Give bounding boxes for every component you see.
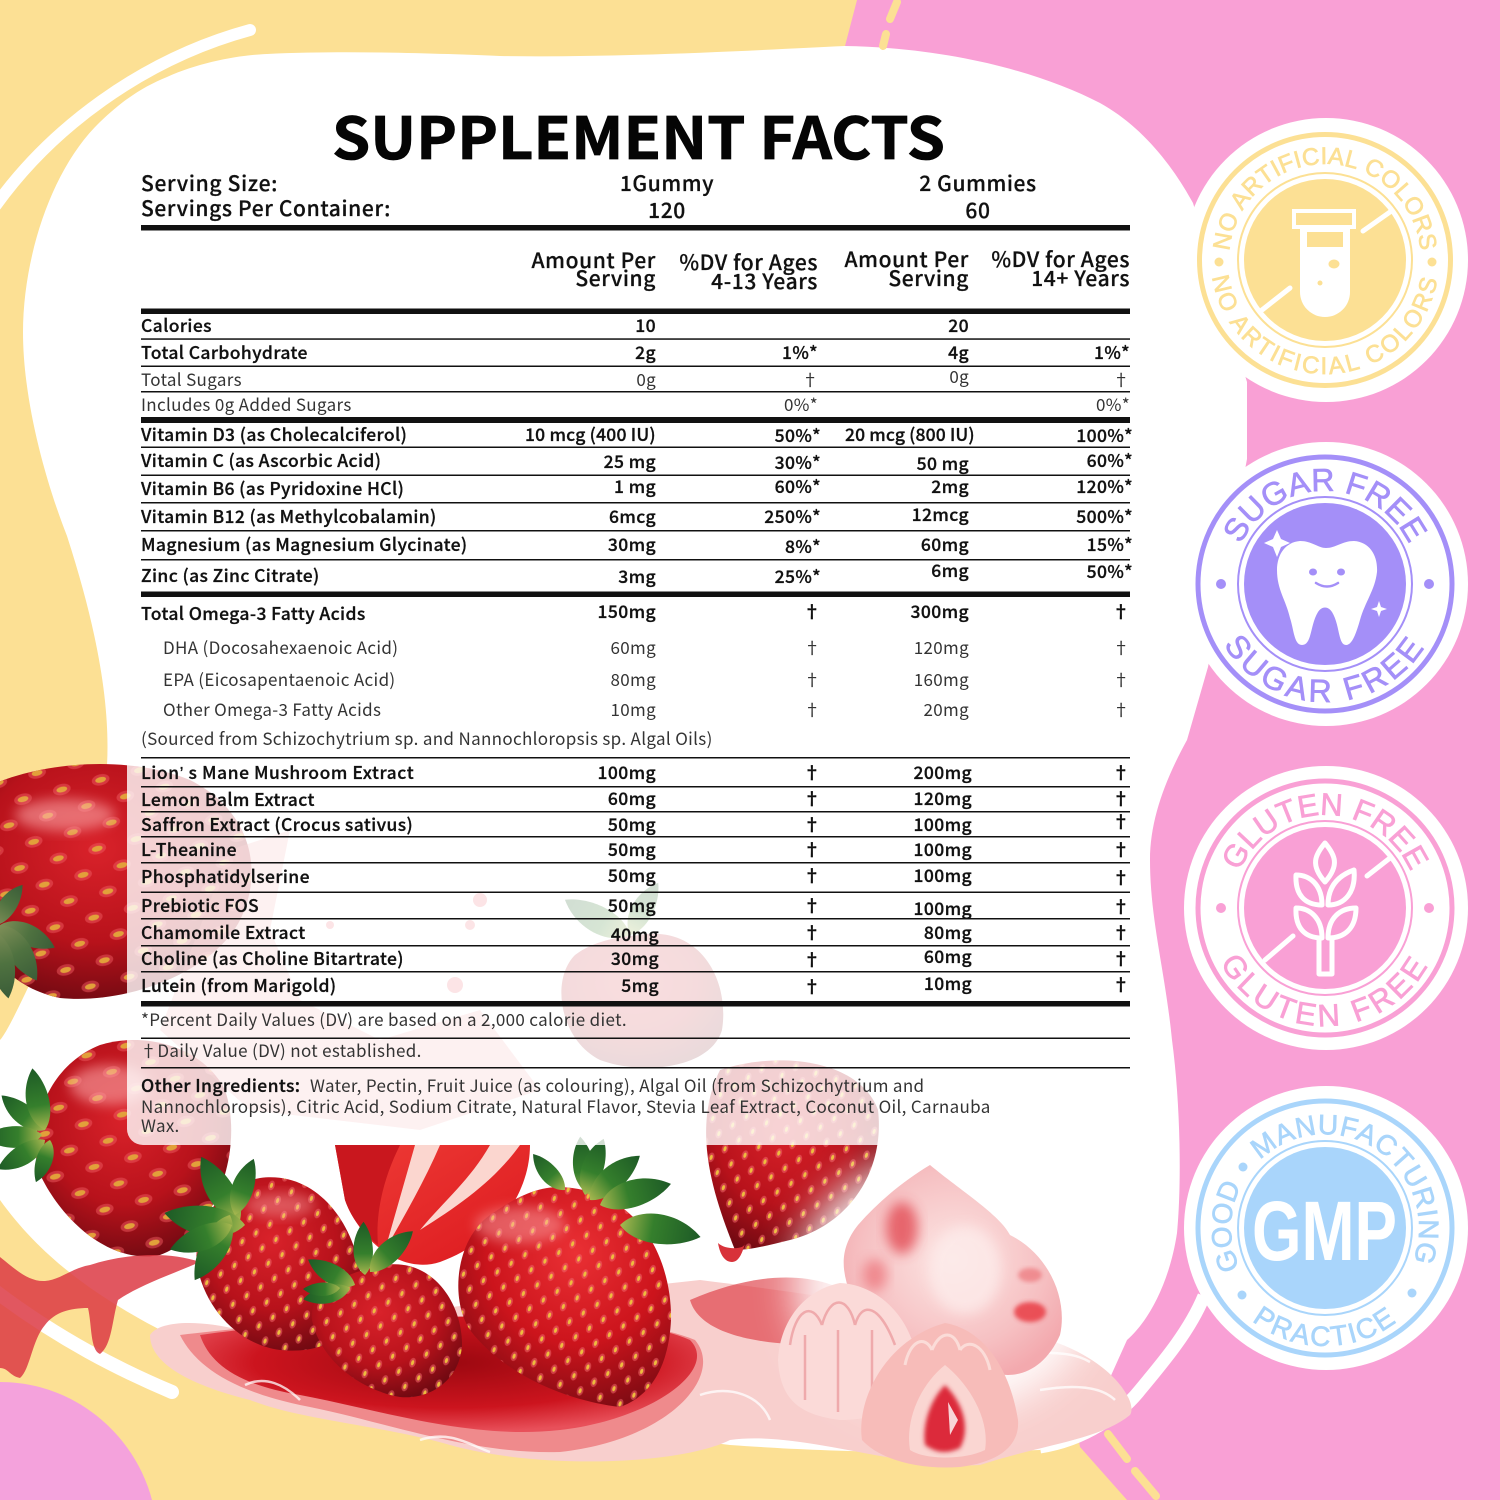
rows: vitamins and minerals: 6mg <box>931 558 969 583</box>
rows: vitamins and minerals: 50%* <box>775 423 821 448</box>
rows: vitamins and minerals: 12mcg <box>912 502 969 527</box>
rows: vitamins and minerals: 60%* <box>1087 448 1133 473</box>
rows: botanicals: 100mg <box>914 863 972 888</box>
rows: vitamins and minerals: Vitamin C (as Ascorbic Acid) <box>140 448 381 473</box>
rows: calories and carbohydrates: 4g <box>948 340 969 365</box>
rows: vitamins and minerals <box>140 422 1133 589</box>
white curved stripe bottom-left <box>0 1291 172 1392</box>
badge: GMP: GOOD <box>1212 1182 1238 1272</box>
other ingredients: Other Ingredients: <box>141 1073 300 1098</box>
icon: test tube <box>1262 211 1390 317</box>
badge: gluten free: GLUTEN FREE <box>1224 956 1428 1027</box>
badge: no artificial colors: NO ARTIFICIAL COLORS <box>1212 274 1437 375</box>
column headers: 4-13 Years <box>711 266 818 296</box>
rows: calories and carbohydrates: † <box>1113 366 1130 391</box>
rows: calories and carbohydrates: Total Sugars <box>141 366 242 391</box>
rows: botanicals: † <box>1112 972 1130 997</box>
rows: omega-3: Total Omega-3 Fatty Acids <box>141 601 366 626</box>
badge: GMP: PRACTICE <box>1253 1306 1396 1346</box>
rows: calories and carbohydrates: 0g <box>636 366 656 391</box>
column headers: Amount Per <box>845 244 969 274</box>
rows: botanicals: † <box>1112 837 1130 862</box>
rows: vitamins and minerals: 500%* <box>1076 504 1133 529</box>
table rules <box>141 225 1130 1068</box>
rows: vitamins and minerals: 250%* <box>764 504 821 529</box>
badge: sugar free: SUGAR FREE <box>1224 468 1428 544</box>
rows: calories and carbohydrates: 2g <box>635 340 656 365</box>
serving info <box>141 168 1037 225</box>
rows: botanicals: 10mg <box>924 971 972 996</box>
rows: omega-3: † <box>804 696 821 721</box>
serving info: 2 Gummies <box>919 168 1037 198</box>
badge: gluten free: GLUTEN FREE <box>1224 793 1430 871</box>
gummy: front <box>861 1323 1018 1468</box>
rows: botanicals: 5mg <box>621 973 659 998</box>
gummy: back top <box>844 1165 1062 1375</box>
hanging strawberry right <box>706 1060 879 1262</box>
rows: vitamins and minerals: 120%* <box>1076 474 1133 499</box>
strawberry: lower left <box>0 1040 231 1256</box>
footnotes: *Percent Daily Values (DV) are based on a 2,000 calorie diet. <box>141 1006 627 1031</box>
rows: botanicals: † <box>803 837 821 862</box>
rows: botanicals: Chamomile Extract <box>141 920 306 945</box>
strawberry: centre left <box>162 1150 362 1351</box>
rows: botanicals: 60mg <box>608 786 656 811</box>
serving info: Servings Per Container: <box>141 193 391 223</box>
rows: botanicals: 60mg <box>924 944 972 969</box>
rows: omega-3 <box>141 599 1130 750</box>
supplement facts table <box>140 92 1133 1137</box>
rows: botanicals: L-Theanine <box>141 837 237 862</box>
rows: calories and carbohydrates: Calories <box>141 313 212 338</box>
rows: omega-3: Other Omega-3 Fatty Acids <box>163 696 381 721</box>
rows: botanicals: 50mg <box>608 893 656 918</box>
rows: omega-3: (Sourced from Schizochytrium sp. and Nannochloropsis sp. Algal Oils) <box>141 725 713 750</box>
cut strawberry <box>335 1145 530 1265</box>
rows: calories and carbohydrates: 20 <box>948 313 969 338</box>
rows: calories and carbohydrates: 0g <box>949 363 969 388</box>
rows: botanicals: † <box>803 920 821 945</box>
rows: omega-3: † <box>1113 696 1130 721</box>
other ingredients: Nannochloropsis), Citric Acid, Sodium Citrate, Natural Flavor, Stevia Leaf Extract, Coconut Oil, Carnauba <box>141 1093 991 1118</box>
rows: omega-3: EPA (Eicosapentaenoic Acid) <box>163 666 396 691</box>
background: bottom-left pink circle <box>0 1382 152 1500</box>
strawberry: large right <box>458 1135 703 1407</box>
rows: vitamins and minerals: Vitamin B12 (as Methylcobalamin) <box>140 504 437 529</box>
serving info: 60 <box>965 195 991 225</box>
rows: botanicals: 100mg <box>914 812 972 837</box>
rows: omega-3: 10mg <box>610 696 656 721</box>
other ingredients <box>141 1072 991 1137</box>
rows: vitamins and minerals: 100%* <box>1076 423 1133 448</box>
rows: botanicals: † <box>1112 809 1130 834</box>
rows: vitamins and minerals: 60%* <box>775 474 821 499</box>
rows: vitamins and minerals: 6mcg <box>609 504 656 529</box>
rows: calories and carbohydrates: † <box>802 366 819 391</box>
rows: botanicals: 30mg <box>611 946 659 971</box>
rows: calories and carbohydrates: Total Carbohydrate <box>141 340 308 365</box>
rows: vitamins and minerals: Vitamin B6 (as Pyridoxine HCl) <box>140 476 404 501</box>
rows: calories and carbohydrates: 10 <box>635 313 656 338</box>
rows: vitamins and minerals: 30%* <box>775 450 821 475</box>
rows: vitamins and minerals: Zinc (as Zinc Citrate) <box>141 563 320 588</box>
rows: vitamins and minerals: Vitamin D3 (as Cholecalciferol) <box>140 422 407 447</box>
rows: botanicals: † <box>1112 865 1130 890</box>
rows: vitamins and minerals: Magnesium (as Magnesium Glycinate) <box>141 532 468 557</box>
translucent table backing over fruit <box>127 740 1147 1145</box>
badge: no artificial colors <box>1194 118 1468 402</box>
faded strawberry behind table <box>558 877 723 1068</box>
column headers: %DV for Ages <box>991 244 1130 274</box>
serving info: Serving Size: <box>141 168 278 198</box>
rows: botanicals <box>141 760 1130 999</box>
rows: vitamins and minerals: 25%* <box>775 564 821 589</box>
rows: botanicals: † <box>803 863 821 888</box>
rows: botanicals: 50mg <box>608 863 656 888</box>
rows: vitamins and minerals: 30mg <box>608 532 656 557</box>
rows: botanicals: Prebiotic FOS <box>141 893 259 918</box>
rows: botanicals: † <box>1112 760 1130 785</box>
rows: botanicals: Phosphatidylserine <box>141 864 310 889</box>
footnotes: †Daily Value (DV) not established. <box>140 1037 422 1062</box>
badge: sugar free <box>1196 442 1468 726</box>
rows: vitamins and minerals: 20 mcg (800 IU) <box>845 422 975 447</box>
rows: botanicals: † <box>803 786 821 811</box>
rows: botanicals: † <box>803 812 821 837</box>
rows: vitamins and minerals: 15%* <box>1087 532 1133 557</box>
badge: GMP <box>1184 1086 1468 1370</box>
rows: vitamins and minerals: 10 mcg (400 IU) <box>525 422 656 447</box>
icon: crossed wheat <box>1265 843 1390 974</box>
rows: botanicals: 100mg <box>914 837 972 862</box>
gummies illustration <box>778 1155 1095 1468</box>
rows: omega-3: † <box>804 634 821 659</box>
rows: botanicals: † <box>1112 946 1130 971</box>
rows: omega-3: 120mg <box>914 634 969 659</box>
rows: omega-3: 80mg <box>610 666 656 691</box>
juice pool <box>150 1278 1131 1465</box>
rows: vitamins and minerals: 50%* <box>1087 559 1133 584</box>
strawberry illustration group <box>0 764 1131 1465</box>
strawberry: top left <box>0 764 252 1001</box>
rows: omega-3: 160mg <box>914 666 969 691</box>
badge: gluten free <box>1184 766 1468 1050</box>
rows: botanicals: Choline (as Choline Bitartrate) <box>141 946 404 971</box>
rows: vitamins and minerals: 2mg <box>931 474 969 499</box>
rows: omega-3: † <box>1113 634 1130 659</box>
cream dashes <box>883 2 1156 1496</box>
rows: calories and carbohydrates: 0%* <box>784 391 818 416</box>
rows: vitamins and minerals: 25 mg <box>604 449 656 474</box>
badge: sugar free: SUGAR FREE <box>1226 636 1424 702</box>
rows: calories and carbohydrates: 1%* <box>782 340 818 365</box>
rows: botanicals: 120mg <box>914 786 972 811</box>
rows: omega-3: DHA (Docosahexaenoic Acid) <box>163 634 398 659</box>
rows: calories and carbohydrates: 0%* <box>1096 391 1130 416</box>
rows: calories and carbohydrates: Includes 0g Added Sugars <box>141 391 352 416</box>
other ingredients: Water, Pectin, Fruit Juice (as colouring), Algal Oil (from Schizochytrium and <box>310 1072 924 1097</box>
rows: botanicals: † <box>803 947 821 972</box>
rows: vitamins and minerals: 60mg <box>921 532 969 557</box>
white curved stripe bottom-right <box>1040 1296 1204 1447</box>
rows: omega-3: 300mg <box>911 599 969 624</box>
column headers <box>532 244 1130 296</box>
rows: botanicals: 200mg <box>914 760 972 785</box>
rows: botanicals: † <box>1112 786 1130 811</box>
background: white blob panel <box>0 46 1247 1452</box>
rows: botanicals: Lemon Balm Extract <box>141 787 315 812</box>
rows: omega-3: 150mg <box>598 599 656 624</box>
rows: botanicals: 100mg <box>914 896 972 921</box>
rows: botanicals: † <box>803 760 821 785</box>
badge: no artificial colors: NO ARTIFICIAL COLORS <box>1212 147 1437 250</box>
splash droplets behind table <box>160 830 540 1130</box>
rows: botanicals: 50mg <box>608 837 656 862</box>
rows: calories and carbohydrates: 1%* <box>1094 340 1130 365</box>
rows: botanicals: † <box>803 974 821 999</box>
column headers: %DV for Ages <box>679 247 818 277</box>
rows: botanicals: † <box>1112 920 1130 945</box>
GMP wordmark: GMP <box>1252 1184 1397 1278</box>
rows: botanicals: Lutein (from Marigold) <box>141 973 337 998</box>
rows: omega-3: † <box>1112 599 1130 624</box>
serving info: 1Gummy <box>620 168 714 198</box>
rows: botanicals: Saffron Extract (Crocus sativus) <box>141 812 413 837</box>
column headers: Serving <box>888 263 969 293</box>
rows: botanicals: 50mg <box>608 812 656 837</box>
background: pink field <box>845 0 1500 1500</box>
column headers: 14+ Years <box>1031 263 1130 293</box>
rows: botanicals: 40mg <box>611 922 659 947</box>
rows: vitamins and minerals: 50 mg <box>917 451 969 476</box>
rows: omega-3: 20mg <box>923 696 969 721</box>
rows: botanicals: Lion’ s Mane Mushroom Extract <box>141 760 414 785</box>
rows: omega-3: † <box>1113 666 1130 691</box>
gummy: left <box>778 1283 918 1420</box>
rows: vitamins and minerals: 1 mg <box>614 474 656 499</box>
column headers: Amount Per <box>532 245 656 275</box>
gummy halo <box>795 1155 1095 1415</box>
white curved stripe top-left <box>0 30 250 205</box>
left juice splash <box>0 1255 200 1378</box>
rows: omega-3: † <box>804 666 821 691</box>
column headers: Serving <box>575 263 656 293</box>
footnotes <box>140 1006 627 1062</box>
rows: botanicals: † <box>1112 894 1130 919</box>
serving info: 120 <box>648 195 686 225</box>
badge: GMP: MANUFACTURING <box>1250 1114 1439 1263</box>
rows: botanicals: 80mg <box>924 920 972 945</box>
rows: omega-3: 60mg <box>610 634 656 659</box>
title: SUPPLEMENT FACTS <box>332 92 945 176</box>
other ingredients: Wax. <box>141 1112 180 1137</box>
rows: botanicals: † <box>803 893 821 918</box>
rows: calories and carbohydrates <box>141 313 1130 416</box>
icon: smiling tooth <box>1264 530 1387 645</box>
rows: vitamins and minerals: 8%* <box>785 534 821 559</box>
rows: omega-3: † <box>803 599 821 624</box>
rows: vitamins and minerals: 3mg <box>618 564 656 589</box>
rows: botanicals: 100mg <box>598 760 656 785</box>
strawberry: small front <box>301 1222 462 1397</box>
